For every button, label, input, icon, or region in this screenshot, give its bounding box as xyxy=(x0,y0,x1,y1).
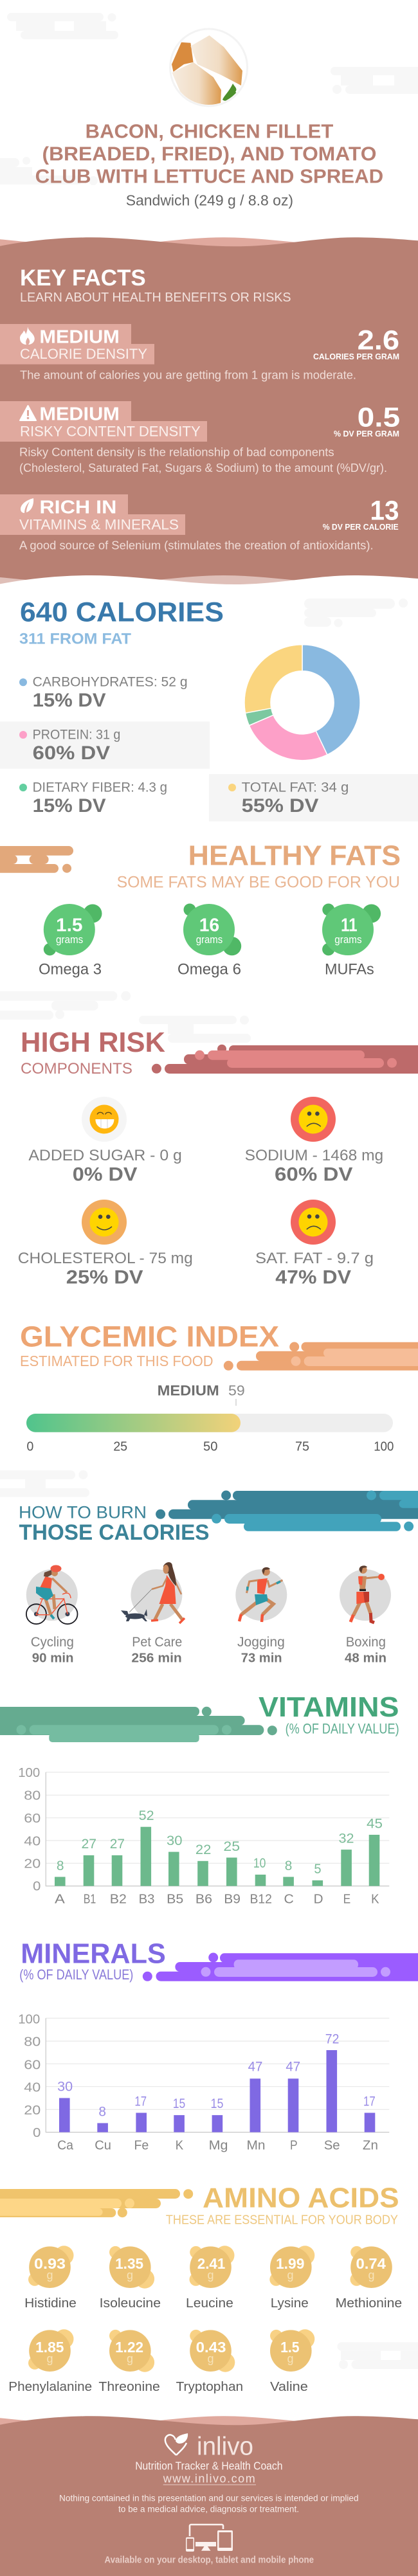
saturated fat: SAT. FAT - 9.7 g xyxy=(255,1250,374,1267)
activity: jogging xyxy=(235,1567,287,1666)
isoleucine xyxy=(100,2246,161,2310)
activity: jogging: Jogging xyxy=(237,1635,285,1650)
fact: calorie density: 2.6 xyxy=(358,325,399,356)
valine xyxy=(270,2329,314,2394)
leucine: 2.41 xyxy=(197,2255,226,2272)
decorative pills xyxy=(152,1045,418,1074)
subheading: ESTIMATED FOR THIS FOOD xyxy=(20,1353,214,1369)
sodium xyxy=(245,1097,383,1185)
phenylalanine: Phenylalanine xyxy=(8,2380,92,2394)
gauge bar: 50 xyxy=(203,1440,217,1454)
legend: carbohydrates: 15% DV xyxy=(33,690,106,711)
panel: healthy fats xyxy=(0,841,401,978)
gauge bar: 0 xyxy=(27,1440,33,1454)
bar chart: vitamins: 20 xyxy=(24,1857,41,1871)
activity: boxing: Boxing xyxy=(346,1635,386,1650)
bar chart: vitamins: A xyxy=(55,1892,65,1907)
leucine: g xyxy=(207,2269,214,2282)
heading: HEALTHY FATS xyxy=(188,841,401,872)
mufas xyxy=(322,904,381,978)
bar chart: vitamins: E xyxy=(343,1892,350,1907)
cholesterol: CHOLESTEROL - 75 mg xyxy=(18,1250,193,1267)
decorative pills xyxy=(0,846,73,873)
bar chart: vitamins: B2 xyxy=(110,1892,127,1907)
fact: risky content density: Risky Content density is the relationship of bad components xyxy=(19,445,334,458)
decorative pills xyxy=(143,1953,418,1981)
fact: calorie density xyxy=(0,324,399,381)
bar chart: minerals: 100 xyxy=(18,2012,40,2026)
lysine xyxy=(269,2246,314,2310)
bar chart: vitamins: C xyxy=(284,1892,294,1907)
bar chart: vitamins: D xyxy=(314,1892,323,1907)
omega 6: grams xyxy=(196,933,223,946)
legend: protein: PROTEIN: 31 g xyxy=(33,728,120,743)
gauge bar: 100 xyxy=(374,1440,394,1454)
saturated fat xyxy=(255,1200,374,1288)
fact: calorie density: CALORIES PER GRAM xyxy=(313,352,399,361)
bar chart: minerals: 30 xyxy=(57,2080,73,2094)
panel: calories xyxy=(0,597,418,822)
bar chart: minerals: Cu xyxy=(95,2138,111,2152)
added sugar: ADDED SUGAR - 0 g xyxy=(28,1147,182,1164)
fact: risky content density xyxy=(0,401,400,474)
tryptophan: 0.43 xyxy=(196,2339,226,2355)
omega 6: 16 xyxy=(199,915,219,935)
valine: g xyxy=(287,2352,294,2365)
subheading: COMPONENTS xyxy=(21,1060,132,1077)
bar chart: vitamins: 40 xyxy=(24,1834,41,1849)
subheading: from fat: 311 FROM FAT xyxy=(19,631,131,648)
activity: pet care xyxy=(121,1562,185,1666)
histidine: g xyxy=(46,2269,53,2282)
threonine xyxy=(98,2330,160,2394)
panel: amino acids xyxy=(0,2183,402,2394)
serving size: Sandwich (249 g / 8.8 oz) xyxy=(126,192,293,208)
legend: protein: 60% DV xyxy=(33,743,110,764)
bar chart: minerals: Mg xyxy=(209,2138,228,2152)
methionine xyxy=(336,2246,402,2310)
legend: dietary fiber: DIETARY FIBER: 4.3 g xyxy=(33,780,167,795)
bar chart: vitamins: 45 xyxy=(367,1816,383,1831)
histidine: 0.93 xyxy=(34,2255,66,2272)
histidine xyxy=(24,2246,77,2310)
availability note: Available on your desktop, tablet and mobile phone xyxy=(104,2555,314,2566)
subheading: (% OF DAILY VALUE) xyxy=(19,1967,133,1983)
fact: risky content density: 0.5 xyxy=(358,402,400,433)
fact: risky content density: (Cholesterol, Saturated Fat, Sugars & Sodium) to the amount (%DV/gr). xyxy=(19,461,387,474)
bar chart: minerals: P xyxy=(290,2138,298,2152)
bar chart: minerals: K xyxy=(176,2138,183,2152)
bar chart: vitamins: B1 xyxy=(84,1892,96,1907)
title: BACON, CHICKEN FILLET xyxy=(86,120,334,142)
gauge value: 59 xyxy=(228,1383,245,1399)
gauge value: MEDIUM xyxy=(158,1383,219,1399)
bar chart: vitamins: B12 xyxy=(250,1892,272,1907)
disclaimer xyxy=(59,2493,359,2514)
legend: dietary fiber xyxy=(19,780,167,816)
gauge bar: 75 xyxy=(295,1440,309,1454)
leucine: Leucine xyxy=(186,2296,233,2310)
panel: key facts xyxy=(0,237,418,598)
title xyxy=(35,120,383,187)
heading: key facts: KEY FACTS xyxy=(20,266,146,291)
phenylalanine: g xyxy=(46,2352,53,2365)
threonine: Threonine xyxy=(98,2380,160,2394)
tryptophan xyxy=(176,2330,243,2394)
leucine xyxy=(186,2246,234,2310)
disclaimer: Nothing contained in this presentation and our services is intended or implied xyxy=(59,2493,359,2503)
mufas: MUFAs xyxy=(325,961,374,978)
logo: inlivo: inlivo xyxy=(197,2432,253,2460)
histidine: Histidine xyxy=(24,2296,77,2310)
heading: 640 calories: 640 CALORIES xyxy=(20,597,224,628)
heading: THOSE CALORIES xyxy=(19,1520,210,1545)
heading: HIGH RISK xyxy=(21,1027,166,1058)
activity: pet care: Pet Care xyxy=(132,1635,182,1650)
decorative pills xyxy=(0,2189,193,2217)
bar chart: vitamins: 5 xyxy=(314,1862,322,1877)
bar chart: vitamins: B5 xyxy=(167,1892,183,1907)
omega 6: Omega 6 xyxy=(177,961,241,978)
lysine: Lysine xyxy=(271,2296,309,2310)
icon: leaf xyxy=(21,498,33,513)
bar chart: vitamins: 0 xyxy=(33,1879,41,1894)
activity: boxing: 48 min xyxy=(345,1652,386,1666)
heading: MINERALS xyxy=(21,1938,166,1969)
mufas: grams xyxy=(334,933,362,946)
bar chart: minerals: 0 xyxy=(33,2125,41,2140)
panel: footer xyxy=(0,2416,418,2576)
bar chart: vitamins: 22 xyxy=(195,1842,211,1857)
fact: rich in vitamins and minerals xyxy=(0,494,399,552)
fact: calorie density: The amount of calories you are getting from 1 gram is moderate. xyxy=(20,368,356,381)
bar chart: vitamins: 60 xyxy=(24,1811,41,1826)
bar chart: minerals: 15 xyxy=(211,2096,223,2111)
panel: high risk components xyxy=(18,1027,418,1288)
fact: rich in vitamins and minerals: A good source of Selenium (stimulates the creation of antioxidants). xyxy=(19,538,374,552)
bar chart: minerals: 15 xyxy=(173,2096,185,2111)
website link: www.inlivo.com xyxy=(163,2472,255,2485)
omega 3: 1.5 xyxy=(56,915,82,935)
subheading: SOME FATS MAY BE GOOD FOR YOU xyxy=(117,874,400,892)
bar chart: vitamins: 10 xyxy=(253,1856,266,1871)
added sugar: 0% DV xyxy=(73,1164,138,1185)
isoleucine: Isoleucine xyxy=(100,2296,161,2310)
bar chart: minerals: 60 xyxy=(24,2057,41,2072)
legend: dietary fiber: 15% DV xyxy=(33,795,106,816)
bar chart: minerals: 20 xyxy=(24,2103,41,2118)
activity: cycling xyxy=(26,1565,78,1666)
legend: protein xyxy=(0,721,210,769)
fact: calorie density: MEDIUM xyxy=(39,327,120,347)
methionine: 0.74 xyxy=(356,2255,386,2272)
heading: AMINO ACIDS xyxy=(203,2183,399,2213)
panel: how to burn calories xyxy=(19,1490,418,1666)
sodium: SODIUM - 1468 mg xyxy=(245,1147,383,1164)
activity: cycling: 90 min xyxy=(32,1652,73,1666)
bar chart: minerals: 8 xyxy=(98,2105,106,2120)
fact: risky content density: RISKY CONTENT DENSITY xyxy=(20,423,201,439)
bar chart: vitamins: B3 xyxy=(139,1892,154,1907)
icon: warning xyxy=(20,406,36,420)
cholesterol: 25% DV xyxy=(66,1267,143,1288)
bar chart: vitamins: K xyxy=(371,1892,379,1907)
icon: devices xyxy=(186,2525,233,2552)
bar chart: vitamins: B9 xyxy=(224,1892,241,1907)
bar chart: minerals: Zn xyxy=(363,2138,378,2152)
decorative pills xyxy=(0,1707,277,1742)
methionine: g xyxy=(368,2269,375,2282)
food photo in circle xyxy=(170,29,248,106)
threonine: 1.22 xyxy=(115,2339,143,2355)
legend: total fat xyxy=(209,774,418,822)
fact: risky content density: MEDIUM xyxy=(39,404,120,424)
fact: rich in vitamins and minerals: RICH IN xyxy=(39,497,116,518)
bar chart: minerals: 80 xyxy=(24,2035,41,2049)
bar chart: minerals: 72 xyxy=(325,2031,339,2046)
activity: boxing xyxy=(340,1565,391,1666)
disclaimer: to be a medical advice, diagnosis or treatment. xyxy=(118,2504,299,2514)
icon: flame xyxy=(20,327,35,345)
legend: total fat: TOTAL FAT: 34 g xyxy=(242,780,349,795)
tryptophan: Tryptophan xyxy=(176,2380,243,2394)
bar chart: minerals: 47 xyxy=(248,2060,262,2075)
fact: calorie density: CALORIE DENSITY xyxy=(20,346,147,362)
subheading: LEARN ABOUT HEALTH BENEFITS OR RISKS xyxy=(20,291,291,305)
omega 3: Omega 3 xyxy=(39,961,102,978)
tagline: Nutrition Tracker & Health Coach xyxy=(135,2460,283,2472)
gauge value xyxy=(158,1383,245,1406)
donut chart xyxy=(244,645,360,761)
panel: minerals xyxy=(18,1938,418,2152)
lysine: g xyxy=(287,2269,294,2282)
methionine: Methionine xyxy=(336,2296,402,2310)
bar chart: minerals: 40 xyxy=(24,2080,41,2094)
isoleucine: 1.35 xyxy=(115,2255,143,2272)
fact: rich in vitamins and minerals: % DV PER CALORIE xyxy=(323,522,399,532)
saturated fat: 47% DV xyxy=(275,1267,351,1288)
bar chart: vitamins: 30 xyxy=(167,1833,183,1848)
panel: vitamins xyxy=(0,1692,399,1907)
bar chart: vitamins: 27 xyxy=(81,1837,96,1851)
activity: cycling: Cycling xyxy=(31,1635,74,1650)
bar chart: vitamins: 25 xyxy=(223,1839,240,1854)
bar chart: minerals: Fe xyxy=(134,2138,149,2152)
bar chart: minerals: 17 xyxy=(363,2094,376,2109)
legend: total fat: 55% DV xyxy=(242,795,318,816)
heading: VITAMINS xyxy=(259,1692,399,1723)
bar chart: vitamins: 8 xyxy=(285,1859,292,1873)
sodium: 60% DV xyxy=(275,1164,352,1185)
phenylalanine xyxy=(8,2329,92,2394)
title: (BREADED, FRIED), AND TOMATO xyxy=(42,143,377,165)
heading: HOW TO BURN xyxy=(19,1503,147,1522)
bar chart: minerals: Mn xyxy=(247,2138,265,2152)
gauge bar xyxy=(26,1414,394,1454)
omega 3: grams xyxy=(56,933,83,946)
decorative pills xyxy=(156,1490,418,1531)
bar chart: minerals: 47 xyxy=(286,2060,300,2075)
bar chart: vitamins: 80 xyxy=(24,1788,41,1803)
mufas: 11 xyxy=(341,915,358,935)
bar chart: minerals xyxy=(18,2012,389,2152)
bar chart: minerals: 17 xyxy=(134,2094,147,2109)
activity: jogging: 73 min xyxy=(241,1652,282,1666)
valine: 1.5 xyxy=(280,2339,300,2355)
decorative pills xyxy=(224,1342,418,1371)
bar chart: minerals: Se xyxy=(324,2138,340,2152)
tryptophan: g xyxy=(207,2352,214,2365)
fact: rich in vitamins and minerals: VITAMINS & MINERALS xyxy=(19,516,179,532)
isoleucine: g xyxy=(127,2269,133,2282)
cholesterol xyxy=(18,1200,193,1288)
bar chart: vitamins: 27 xyxy=(110,1837,125,1851)
legend: carbohydrates xyxy=(19,675,188,711)
bar chart: vitamins: 100 xyxy=(18,1765,40,1780)
activity: pet care: 256 min xyxy=(131,1652,182,1666)
bar chart: vitamins: 32 xyxy=(338,1832,354,1846)
phenylalanine: 1.85 xyxy=(35,2339,64,2355)
fact: risky content density: % DV PER GRAM xyxy=(334,429,399,438)
bar chart: minerals: Ca xyxy=(57,2138,74,2152)
bar chart: vitamins xyxy=(18,1765,389,1907)
threonine: g xyxy=(127,2352,133,2365)
panel: glycemic index xyxy=(20,1320,418,1454)
lysine: 1.99 xyxy=(276,2255,304,2272)
bar chart: vitamins: 8 xyxy=(57,1859,64,1873)
heading: GLYCEMIC INDEX xyxy=(20,1320,279,1353)
bar chart: vitamins: 52 xyxy=(139,1808,154,1823)
heading xyxy=(19,1503,210,1545)
fact: rich in vitamins and minerals: 13 xyxy=(370,495,399,526)
bar chart: vitamins: B6 xyxy=(195,1892,212,1907)
omega 6 xyxy=(177,904,241,978)
omega 3 xyxy=(39,904,102,978)
legend: carbohydrates: CARBOHYDRATES: 52 g xyxy=(33,675,188,690)
valine: Valine xyxy=(270,2380,308,2394)
title: CLUB WITH LETTUCE AND SPREAD xyxy=(35,165,383,187)
gauge bar: 25 xyxy=(113,1440,127,1454)
added sugar xyxy=(28,1097,182,1185)
logo: inlivo xyxy=(165,2432,253,2460)
